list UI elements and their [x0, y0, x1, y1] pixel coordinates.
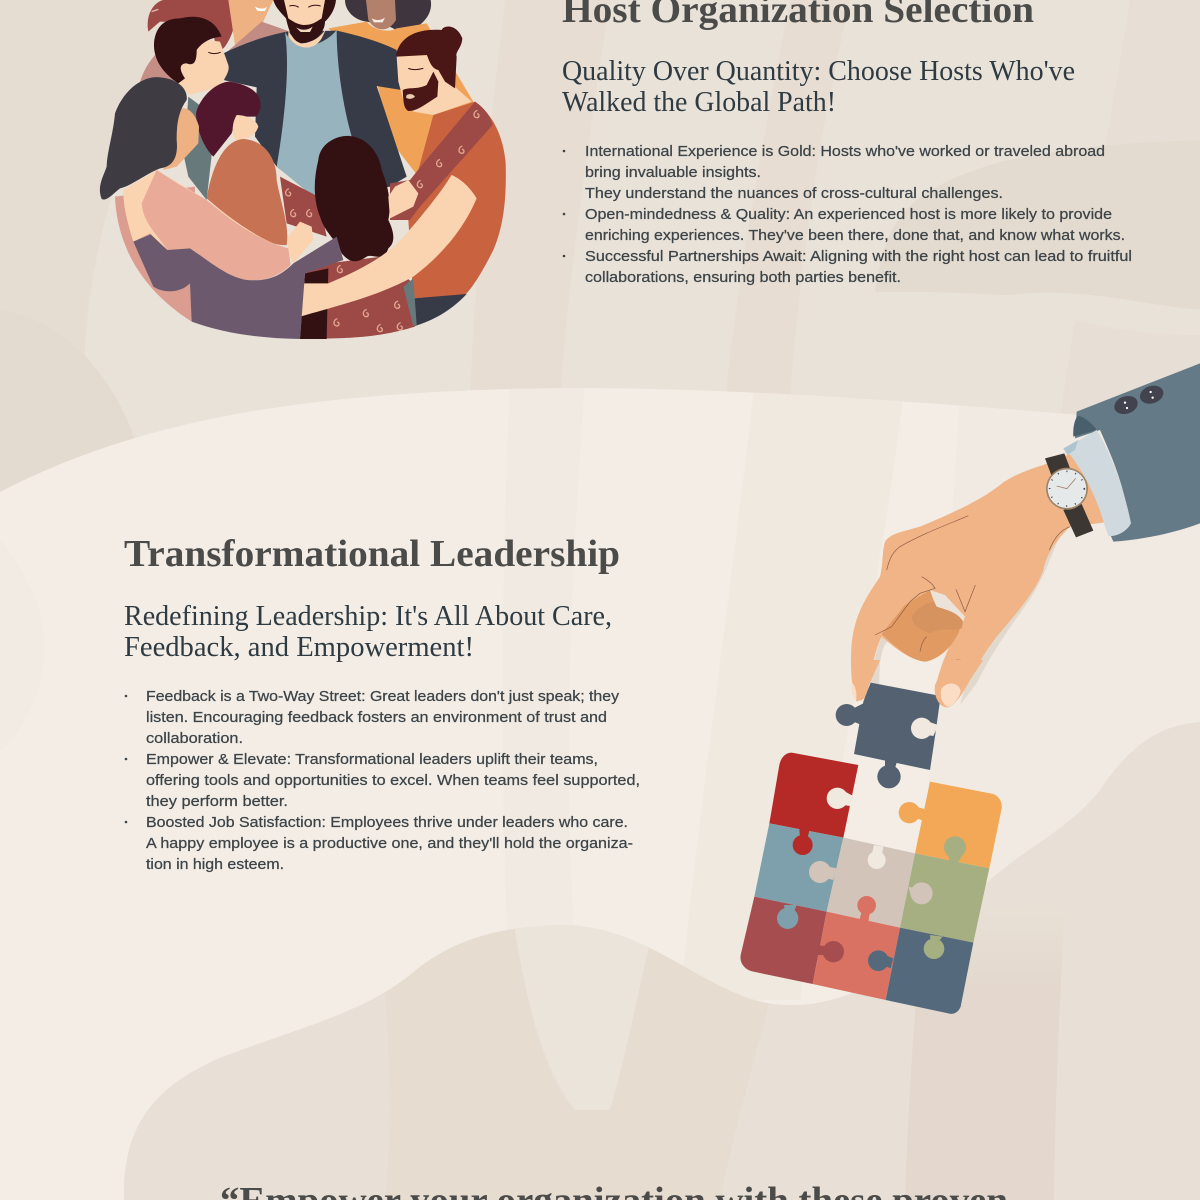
- wrist watch: [1045, 453, 1093, 537]
- woman with dark curly hair: [328, 0, 473, 177]
- bullet list: leadership points: A happy employee is a productive one, and they'll hold the organiza-: [146, 835, 633, 852]
- bullet list: leadership points: they perform better.: [146, 793, 288, 810]
- loose puzzle piece: [836, 683, 941, 788]
- bullet list: host selection points: International Experience is Gold: Hosts who've worked or traveled abroad: [585, 143, 1105, 160]
- red-haired person: [148, 0, 290, 55]
- bullet list: leadership points: listen. Encouraging feedback fosters an environment of trust and: [146, 709, 607, 726]
- bottom dark wave: [124, 722, 1200, 1200]
- bullet list: leadership points: tion in high esteem.: [146, 856, 284, 873]
- lower light wave: [0, 388, 1200, 1200]
- bullet list: leadership points: Empower & Elevate: Transformational leaders uplift their teams,: [146, 751, 598, 768]
- person with burgundy hair: [196, 82, 287, 245]
- bullet list: leadership points: collaboration.: [146, 730, 243, 747]
- bullet list: host selection points: Successful Partnerships Await: Aligning with the right host can lead to fruitful: [585, 248, 1132, 265]
- bullet list: leadership points: Feedback is a Two-Way Street: Great leaders don't just speak; they: [146, 688, 620, 705]
- heading: transformational leadership: Transformational Leadership: [124, 533, 620, 575]
- embracing arm with hand: [273, 175, 477, 317]
- bullet list: host selection points: collaborations, ensuring both parties benefit.: [585, 269, 901, 286]
- man in centre with jacket: [223, 0, 407, 200]
- section: host organization selection: [562, 0, 1132, 286]
- hand: [851, 452, 1112, 707]
- section: transformational leadership: [124, 533, 640, 873]
- woman with long black hair from behind: [280, 136, 417, 339]
- puzzle tiles: [740, 753, 1002, 1014]
- boy with dark hair: [154, 17, 229, 200]
- subheading: redefining leadership: [124, 601, 612, 663]
- bullet list: host selection points: [563, 143, 1132, 286]
- woman in pink with dark wavy hair: [100, 77, 343, 339]
- bullet list: leadership points: offering tools and opportunities to excel. When teams feel supported,: [146, 772, 640, 789]
- bullet list: host selection points: They understand the nuances of cross-cultural challenges.: [585, 185, 1003, 202]
- subheading: redefining leadership: Redefining Leadership: It's All About Care,: [124, 601, 612, 632]
- puzzle knobs and notches: [777, 788, 966, 971]
- fingertips over piece: [851, 660, 983, 707]
- man with bun and beard: [390, 26, 506, 326]
- bullet list: leadership points: [125, 688, 640, 873]
- bullet list: host selection points: enriching experiences. They've been there, done that, and know what works.: [585, 227, 1125, 244]
- illustration: jigsaw puzzle: [740, 660, 1002, 1014]
- background: [0, 318, 1200, 1200]
- illustration: hand with suit sleeve and watch: [851, 363, 1200, 707]
- subheading: quality over quantity: Quality Over Quantity: Choose Hosts Who've: [562, 56, 1075, 87]
- subheading: quality over quantity: Walked the Global Path!: [562, 87, 836, 118]
- bullet list: host selection points: bring invaluable insights.: [585, 164, 761, 181]
- sleeve with buttons: [1063, 363, 1200, 542]
- illustration: group of people hugging: [100, 0, 506, 339]
- subheading: redefining leadership: Feedback, and Empowerment!: [124, 632, 474, 663]
- bullet list: leadership points: Boosted Job Satisfaction: Employees thrive under leaders who care.: [146, 814, 628, 831]
- bullet list: host selection points: Open-mindedness & Quality: An experienced host is more likely to provide: [585, 206, 1112, 223]
- subheading: quality over quantity: [562, 56, 1075, 118]
